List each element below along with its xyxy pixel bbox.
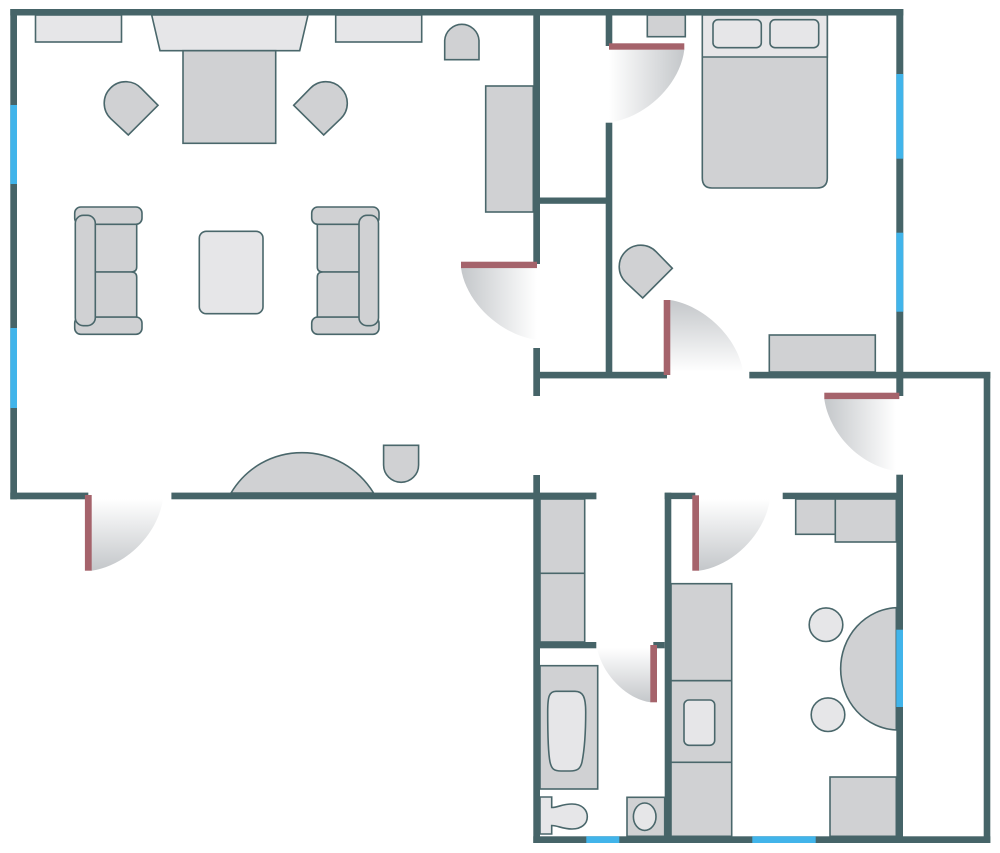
living room window upper	[10, 105, 17, 184]
left shelf	[36, 15, 122, 42]
bed	[702, 15, 827, 188]
bottom wall	[533, 836, 990, 843]
rug in front of fireplace	[183, 51, 276, 143]
bay window seat	[231, 453, 374, 493]
arched side table	[445, 24, 479, 60]
doors	[85, 43, 899, 702]
bathroom fixtures	[540, 666, 665, 836]
door swing: entrance	[92, 499, 163, 571]
semicircular dining table	[841, 608, 896, 730]
living room bottom wall left	[10, 493, 88, 499]
door leaf: living room closet	[461, 262, 537, 268]
door swing: bedroom	[670, 300, 743, 372]
door swing: bedroom closet	[609, 50, 684, 123]
small cabinet	[796, 499, 835, 534]
bedroom window upper	[896, 74, 903, 159]
wardrobe	[486, 86, 533, 212]
tall cabinet	[835, 499, 896, 542]
kitchen left wall	[665, 493, 671, 843]
bathtub basin	[548, 691, 586, 771]
stool bottom	[811, 698, 845, 732]
door leaf: bedroom	[664, 300, 670, 375]
kitchen right wall	[896, 475, 903, 843]
door leaf: kitchen	[692, 495, 699, 571]
door leaf: bedroom closet	[609, 43, 684, 50]
bedroom furniture	[619, 15, 875, 372]
living room left wall	[10, 9, 17, 499]
bathroom top wall	[540, 642, 596, 648]
door swings	[92, 50, 896, 702]
living room bottom wall right	[171, 493, 596, 499]
armchair left	[104, 82, 158, 135]
fireplace hearth	[152, 15, 308, 51]
closet divider	[540, 198, 606, 204]
door swing: kitchen	[699, 499, 770, 571]
interior wall upper	[533, 15, 540, 264]
door leaf: kitchen side	[824, 393, 899, 399]
door leaf: entrance	[85, 495, 92, 571]
closet wall top	[606, 15, 612, 46]
door swing: bathroom	[597, 648, 650, 702]
right shelf	[336, 15, 422, 42]
armchair right	[294, 82, 347, 135]
bathtub surround	[540, 666, 598, 789]
toilet	[540, 797, 587, 834]
bathroom window	[586, 836, 619, 843]
far right wall	[984, 372, 990, 843]
hall wall right	[749, 372, 990, 378]
top wall	[10, 9, 903, 16]
bathroom wall stub	[653, 642, 665, 648]
door swing: kitchen side	[824, 399, 896, 471]
nightstand	[647, 15, 685, 37]
kitchen window bottom	[752, 836, 816, 843]
kitchen window right	[896, 630, 903, 707]
corner unit	[830, 777, 896, 836]
bath left wall	[533, 475, 540, 843]
kitchen top wall right	[783, 493, 903, 499]
kitchen furniture	[540, 499, 896, 836]
washing machine	[627, 797, 665, 836]
door leaf: bathroom	[650, 645, 657, 702]
hall cabinets	[540, 499, 585, 642]
closet wall lower	[606, 123, 612, 373]
bedroom chair	[619, 245, 672, 298]
living room window lower	[10, 328, 17, 408]
hall wall left	[540, 372, 667, 378]
stool top	[809, 608, 843, 642]
dresser	[769, 335, 875, 372]
left sofa	[75, 207, 142, 334]
bedroom right wall	[896, 9, 903, 396]
washing machine drum	[633, 803, 656, 830]
kitchen top wall left	[665, 493, 695, 499]
interior wall stub	[533, 348, 540, 396]
door swing: living room closet	[461, 268, 537, 340]
kitchen sink	[684, 700, 715, 745]
kitchen counter	[671, 584, 732, 836]
right sofa	[312, 207, 379, 334]
u-shaped side table	[384, 445, 419, 482]
living room furniture	[36, 15, 533, 493]
bedroom window lower	[896, 233, 903, 312]
coffee table	[199, 231, 263, 314]
